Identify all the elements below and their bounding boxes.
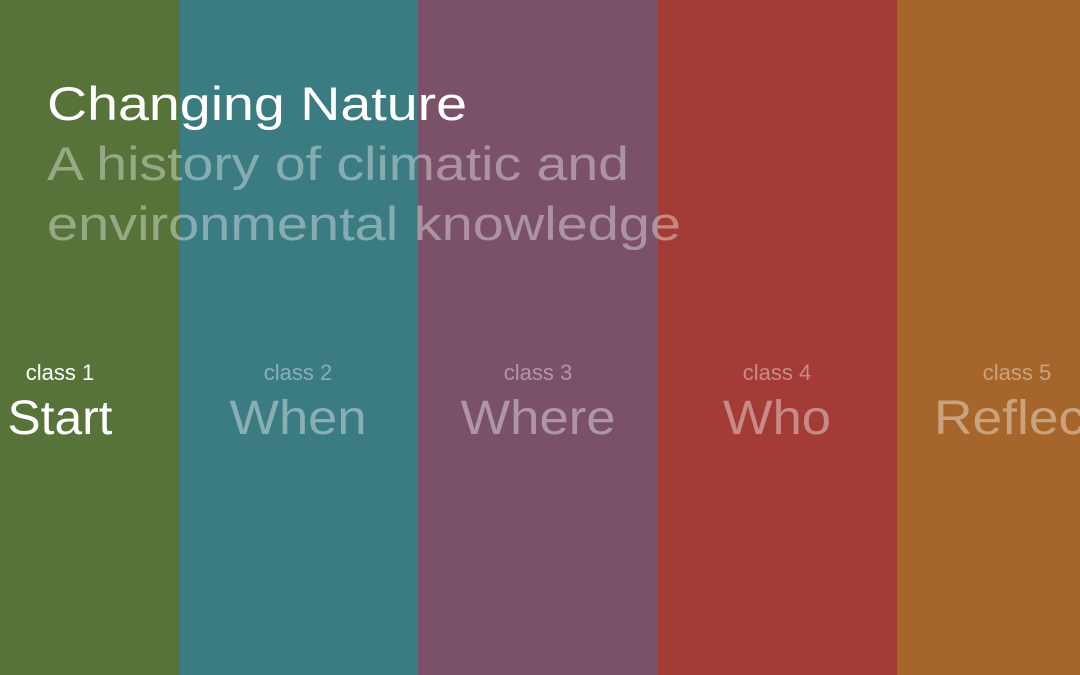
label: class 2 When: When: [230, 392, 366, 445]
panel: class 2 column: [180, 0, 418, 675]
subtitle: A history of climatic and: [47, 137, 629, 190]
label: class 3 Where: class 3: [504, 360, 572, 385]
panel: class 3 column: [418, 0, 658, 675]
label: class 1 Start: class 1: [26, 360, 94, 385]
label: class 5 Reflect: Reflect: [934, 392, 1080, 445]
label: class 4 Who: [723, 360, 831, 445]
label: class 5 Reflect: class 5: [983, 360, 1051, 385]
label: class 4 Who: Who: [723, 392, 831, 445]
panel: class 4 column: [658, 0, 897, 675]
label: class 1 Start: Start: [8, 392, 113, 445]
label: class 3 Where: [460, 360, 616, 445]
label: class 2 When: [230, 360, 366, 445]
label: class 4 Who: class 4: [743, 360, 811, 385]
label: class 1 Start: [8, 360, 113, 445]
label: class 2 When: class 2: [264, 360, 332, 385]
subtitle: [47, 137, 681, 250]
label: class 5 Reflect: [934, 360, 1080, 445]
subtitle: environmental knowledge: [47, 197, 681, 250]
panel: class 1 column: [0, 0, 180, 675]
panel: class 5 column: [897, 0, 1080, 675]
label: class 3 Where: Where: [460, 392, 616, 445]
title: Changing Nature: [47, 77, 467, 130]
